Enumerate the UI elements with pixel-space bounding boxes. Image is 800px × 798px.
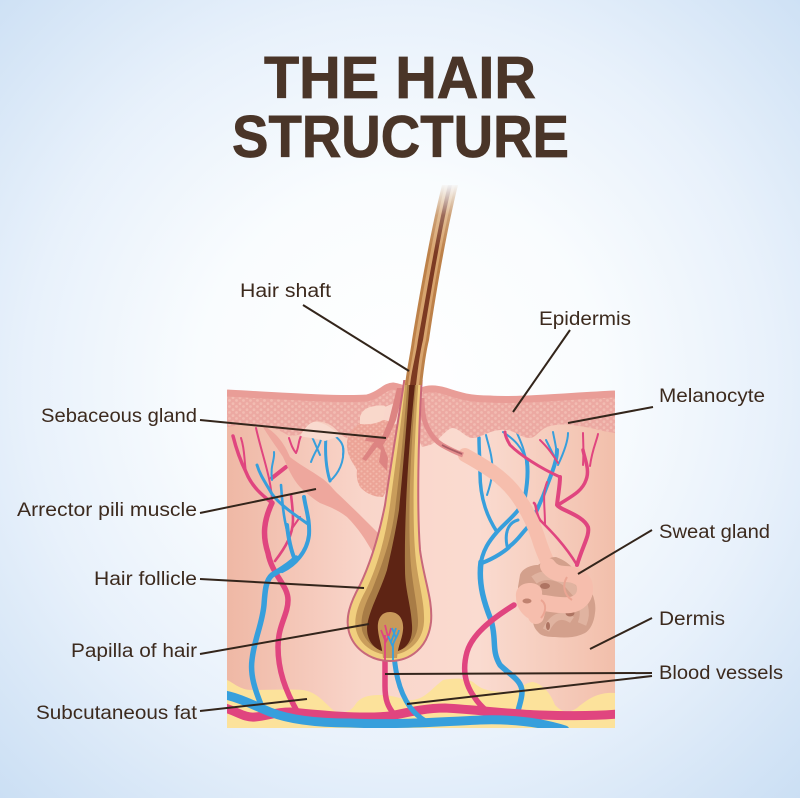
epidermis	[227, 390, 615, 447]
label: Epidermis: Epidermis	[539, 309, 631, 330]
dermis layer	[227, 400, 615, 728]
label: Papilla of hair	[71, 624, 369, 662]
label: Blood vessels: Blood vessels	[659, 663, 783, 684]
label: Hair shaft: Hair shaft	[240, 281, 332, 302]
label: Sweat gland: Sweat gland	[659, 522, 770, 543]
label: Sweat gland	[578, 522, 770, 574]
blood vessels: horizontal trunks	[227, 661, 615, 728]
label: Hair follicle	[94, 569, 364, 590]
label: Epidermis	[513, 309, 631, 412]
label: Arrector pili muscle: Arrector pili muscle	[17, 500, 197, 521]
hair follicle	[348, 375, 431, 661]
label: Arrector pili muscle	[17, 489, 316, 521]
label: Hair follicle: Hair follicle	[94, 569, 197, 590]
sweat duct	[422, 398, 550, 567]
panel: skin cross-section	[225, 375, 618, 730]
blood vessels: lower right	[465, 562, 522, 716]
label: Subcutaneous fat: Subcutaneous fat	[36, 703, 198, 724]
subcutaneous fat layer	[227, 679, 615, 728]
papilla capillaries	[381, 625, 391, 660]
blood vessels: left	[233, 428, 343, 713]
dermis lobes below epidermis	[300, 422, 340, 441]
label: Sebaceous gland	[41, 406, 386, 438]
follicle outer sheath	[348, 375, 431, 661]
blood vessels: right	[479, 432, 598, 568]
label: Papilla of hair: Papilla of hair	[71, 641, 198, 662]
follicle dark core	[367, 375, 416, 651]
title: STRUCTURE	[232, 104, 569, 170]
follicle inner layer	[361, 375, 418, 652]
follicle mid layer	[355, 375, 424, 655]
label: Dermis: Dermis	[659, 609, 725, 630]
label: Sebaceous gland: Sebaceous gland	[41, 406, 197, 427]
sebaceous gland	[347, 388, 404, 497]
title	[232, 45, 569, 170]
title: THE HAIR	[264, 45, 536, 111]
hair shaft	[405, 185, 458, 385]
hair papilla	[378, 612, 403, 658]
sweat gland	[516, 557, 595, 638]
label: Blood vessels	[385, 663, 783, 704]
label: Melanocyte	[568, 386, 765, 423]
label: Dermis	[590, 609, 725, 649]
label: Melanocyte: Melanocyte	[659, 386, 765, 407]
label: Hair shaft	[240, 281, 409, 371]
arrector pili muscle	[262, 425, 378, 553]
epidermis top edge	[227, 386, 615, 399]
label: Subcutaneous fat	[36, 699, 307, 724]
